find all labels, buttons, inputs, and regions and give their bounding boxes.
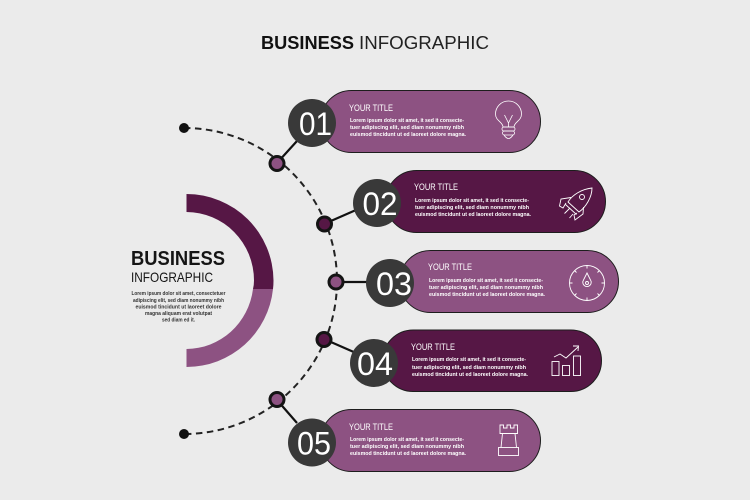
center text block: Lorem ipsum dolor sit amet, consectetuer <box>132 291 226 297</box>
center text block: sed diam ed it. <box>162 318 196 324</box>
node 2 <box>318 217 332 231</box>
icon: gauge <box>570 266 604 300</box>
card 5 text: YOUR TITLE <box>349 422 393 432</box>
node 5 <box>270 392 284 406</box>
card 4 text <box>411 342 529 378</box>
connector 3 <box>336 281 368 283</box>
card 1 text: Lorem ipsum dolor sit amet, it sed it consecte- <box>350 118 464 124</box>
pill 5 <box>320 410 540 472</box>
center text block: adipiscing elit, sed diam nonummy nibh <box>133 298 224 304</box>
card 4 text: tuer adipiscing elit, sed diam nonummy nibh <box>412 365 526 371</box>
node 1 <box>270 156 284 170</box>
arc end dot: bottom <box>179 429 189 439</box>
dashed arc timeline <box>184 128 337 434</box>
half ring: lower segment <box>186 289 273 367</box>
card 3 text: euismod tincidunt ut ed laoreet dolore magna. <box>429 292 546 298</box>
icon: growth chart <box>552 346 580 376</box>
connector 2 <box>324 210 356 224</box>
card 2 text: euismod tincidunt ut ed laoreet dolore magna. <box>415 212 532 218</box>
card 5 text: Lorem ipsum dolor sit amet, it sed it consecte- <box>350 437 464 443</box>
card 1 text: euismod tincidunt ut ed laoreet dolore magna. <box>350 132 467 138</box>
title: BUSINESS <box>261 33 354 53</box>
card 1 <box>270 90 540 170</box>
card 2 text <box>414 182 532 218</box>
card 1 text: tuer adipiscing elit, sed diam nonummy nibh <box>350 125 464 131</box>
pill 1 <box>320 90 540 152</box>
card 2 text: YOUR TITLE <box>414 182 458 192</box>
center heading: BUSINESS <box>131 248 225 270</box>
center text block: magna aliquam erat volutpat <box>145 311 212 317</box>
card 1 text: YOUR TITLE <box>349 103 393 113</box>
icon: light bulb <box>496 101 522 138</box>
number badge 3: 03 <box>376 266 412 302</box>
card 5 text: euismod tincidunt ut ed laoreet dolore magna. <box>350 451 467 457</box>
node 4 <box>317 332 331 346</box>
card 5 text: tuer adipiscing elit, sed diam nonummy nibh <box>350 444 464 450</box>
card 5 <box>270 392 540 472</box>
center heading <box>131 248 225 285</box>
card 3 text: tuer adipiscing elit, sed diam nonummy nibh <box>429 285 543 291</box>
card 3 text: YOUR TITLE <box>428 262 472 272</box>
number badge 4: 04 <box>357 346 393 382</box>
node 3 <box>329 275 343 289</box>
card 4 text: YOUR TITLE <box>411 342 455 352</box>
card 3 text <box>428 262 546 298</box>
card 2 text: tuer adipiscing elit, sed diam nonummy nibh <box>415 205 529 211</box>
connector 5 <box>277 400 297 423</box>
card 2 text: Lorem ipsum dolor sit amet, it sed it consecte- <box>415 198 529 204</box>
card 3 text: Lorem ipsum dolor sit amet, it sed it consecte- <box>429 278 543 284</box>
number badge 2: 02 <box>362 186 398 222</box>
number badge 1 <box>288 99 336 147</box>
card 4 text: Lorem ipsum dolor sit amet, it sed it consecte- <box>412 357 526 363</box>
arc end dot: top <box>179 123 189 133</box>
number badge 1: 01 <box>299 106 332 142</box>
card 3 <box>329 250 618 312</box>
number badge 5: 05 <box>297 426 331 462</box>
card 4 <box>317 330 602 392</box>
number badge 5 <box>288 418 336 466</box>
icon: rocket <box>560 188 592 220</box>
card 5 text <box>349 422 467 457</box>
card 2 <box>318 170 606 232</box>
center text block <box>132 291 226 324</box>
pill 3 <box>400 250 618 312</box>
title <box>261 33 489 53</box>
pill 4 <box>382 330 602 392</box>
center text block: euismod tincidunt ut laoreet dolore <box>136 304 222 310</box>
number badge 3 <box>366 259 414 307</box>
number badge 2 <box>353 179 401 227</box>
connector 1 <box>277 141 297 163</box>
card 1 text <box>349 103 467 138</box>
pill 2 <box>386 170 606 232</box>
title: INFOGRAPHIC <box>359 33 489 53</box>
connector 4 <box>324 339 356 353</box>
number badge 4 <box>350 339 398 387</box>
card 4 text: euismod tincidunt ut ed laoreet dolore magna. <box>412 372 529 378</box>
icon: chess rook <box>498 425 518 456</box>
center heading: INFOGRAPHIC <box>131 269 213 285</box>
half ring: upper segment <box>186 194 274 289</box>
